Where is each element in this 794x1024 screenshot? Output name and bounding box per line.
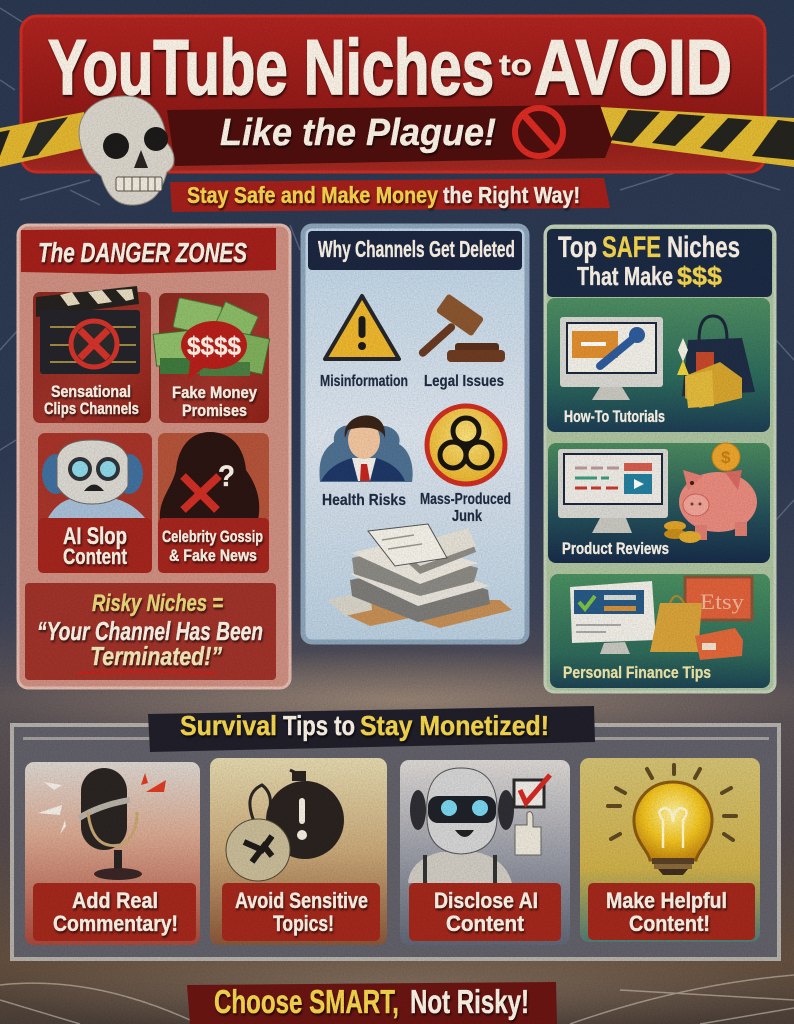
tip card: helpful content [580, 758, 760, 942]
icon: gavel [417, 293, 505, 362]
title: to [499, 49, 532, 82]
title: YouTube Niches [48, 23, 494, 111]
card: celebrity gossip [158, 432, 269, 573]
panel: why channels get deleted [303, 226, 527, 642]
icon: shopping bag and box [677, 316, 755, 408]
icon: man in suit [320, 415, 413, 482]
panel: survival tips [12, 706, 779, 959]
tip card: sensitive topics [210, 758, 387, 945]
heading banner: Tips to [283, 710, 355, 741]
callout: risky niches: Terminated!” [90, 641, 222, 671]
label area: Celebrity Gossip [162, 527, 263, 546]
icon: microphone [38, 768, 166, 880]
heading [308, 231, 522, 270]
card: sensational clips [33, 286, 151, 423]
icon: biohazard [427, 406, 505, 484]
label: Product Reviews [562, 539, 669, 558]
label area [222, 883, 380, 941]
label area: Content! [629, 911, 710, 936]
danger zones heading: The DANGER ZONES [38, 237, 247, 268]
icon: light bulb [608, 765, 736, 875]
label area: Add Real [72, 888, 158, 913]
subtitle text: Like the Plague! [220, 112, 496, 154]
icon: monitor with video [558, 449, 668, 533]
label area: Disclose AI [434, 888, 538, 913]
label: How-To Tutorials [564, 407, 665, 426]
card: fake money [153, 293, 270, 423]
label [44, 382, 139, 418]
panel: top safe niches [545, 226, 775, 692]
heading [547, 229, 772, 297]
label: Mass-Produced [420, 491, 511, 508]
label: Fake Money [172, 383, 257, 402]
label: Health Risks [322, 492, 406, 509]
decorative cracks [0, 975, 794, 1024]
icon: robot with thumbs up [408, 768, 550, 883]
icon: silhouette with cross [160, 432, 259, 520]
header banner [0, 16, 794, 172]
panel: danger zones [18, 225, 290, 688]
label [320, 373, 504, 390]
closing banner [187, 982, 557, 1024]
title: AVOID [534, 23, 732, 111]
label: Misinformation [320, 373, 408, 390]
label area: Make Helpful [606, 888, 727, 913]
label: Promises [182, 401, 247, 420]
closing text: Choose SMART, [214, 983, 399, 1020]
label area [33, 883, 196, 941]
callout: risky niches: Risky Niches = [92, 590, 223, 617]
label area: & Fake News [169, 546, 257, 565]
tip card: disclose AI [400, 760, 570, 945]
label: Personal Finance Tips [563, 663, 711, 682]
subtitle ribbon [167, 105, 612, 166]
card: personal finance tips [550, 574, 770, 688]
card: AI slop [38, 433, 152, 573]
label area [409, 883, 561, 941]
icon: prohibited sign [515, 108, 563, 156]
label area: Topics! [273, 911, 334, 936]
icon: skull [79, 96, 174, 205]
tagline text: the Right Way! [443, 182, 580, 208]
icon: paper pile [328, 524, 512, 628]
icon: bomb and sack [226, 770, 344, 881]
icon: piggy bank with coins [664, 443, 757, 543]
label area [588, 883, 755, 940]
label area: Avoid Sensitive [235, 888, 368, 913]
heading banner: Stay Monetized! [360, 710, 549, 741]
caution tape right [600, 107, 794, 167]
label area: Content [63, 544, 128, 569]
label area: Content [446, 911, 525, 936]
label area [38, 518, 152, 573]
danger zones heading [21, 228, 276, 274]
icon: silhouette with cross: ? [218, 460, 235, 493]
heading: SAFE [602, 231, 661, 264]
icon: monitor with checklist [570, 581, 656, 654]
heading: Top [558, 231, 597, 264]
label area: Commentary! [53, 911, 178, 936]
label area [158, 518, 269, 573]
label: Junk [452, 508, 482, 525]
label [322, 491, 511, 525]
tagline banner [170, 178, 610, 212]
label: Clips Channels [44, 399, 139, 418]
icon: warning triangle [325, 296, 399, 359]
icon: monitor with wrench [560, 317, 663, 400]
tagline text: Stay Safe and Make Money [187, 182, 438, 208]
icon: piggy bank with coins: $ [721, 448, 731, 467]
icon: cash and speech bubble: $$$$ [187, 331, 242, 361]
callout: risky niches: “Your Channel Has Been [37, 616, 263, 646]
label: Sensational [51, 382, 131, 401]
icon: robot [42, 440, 145, 518]
heading: $$$ [677, 261, 723, 291]
card: how-to tutorials [547, 298, 770, 432]
closing text: Not Risky! [410, 983, 529, 1020]
label: Legal Issues [424, 373, 504, 390]
label [172, 383, 257, 420]
icon: Etsy sign, bag and box: Etsy [700, 589, 744, 614]
tip card: commentary [25, 762, 200, 945]
icon: clapperboard [36, 286, 140, 374]
caution tape left [0, 112, 84, 167]
heading: That Make [577, 261, 673, 291]
heading banner: Survival [180, 710, 277, 741]
card: product reviews [548, 443, 770, 563]
heading banner [148, 706, 595, 752]
callout: risky niches [25, 583, 276, 680]
heading: Niches [667, 231, 740, 264]
heading: Why Channels Get Deleted [318, 236, 515, 262]
label area: AI Slop [63, 523, 127, 550]
icon: Etsy sign, bag and box [650, 577, 752, 660]
